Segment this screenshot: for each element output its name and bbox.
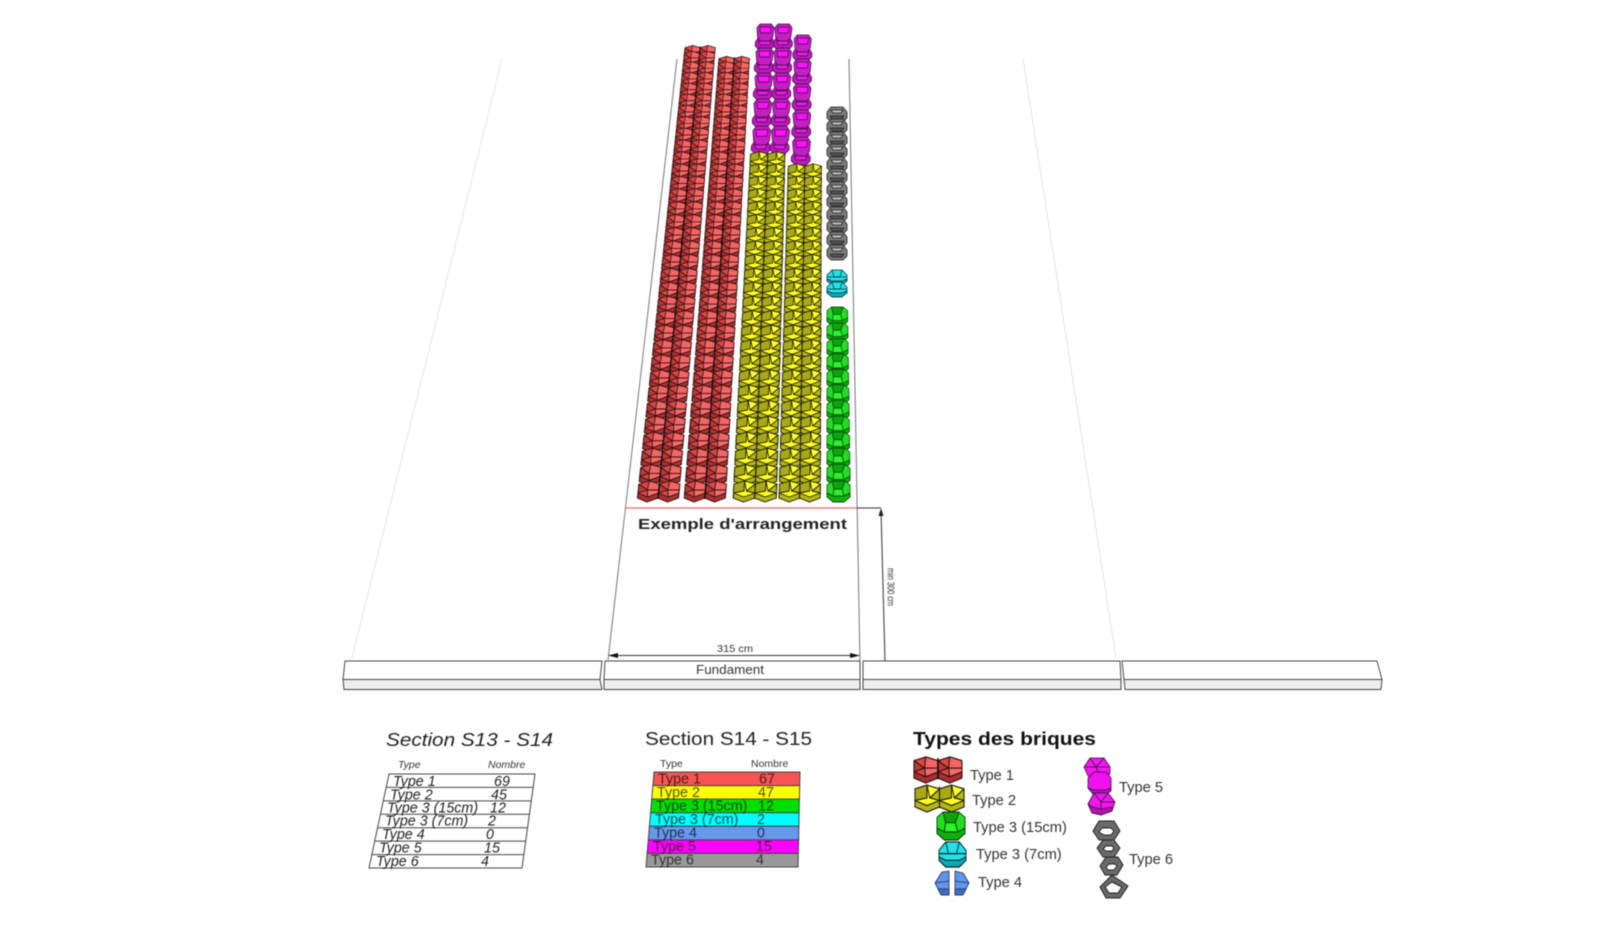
panel: legend of brick types <box>913 729 1173 898</box>
foundation blocks <box>343 661 1382 690</box>
row text: Type 6 <box>651 852 694 868</box>
table rows: Type 3 (7cm) <box>385 814 468 830</box>
icon: type 6 <box>1093 821 1128 898</box>
table rows: Type 5 <box>379 840 422 856</box>
coloured rows <box>646 772 800 867</box>
legend labels: Type 6 <box>1129 852 1173 868</box>
outer guide line left <box>352 59 502 658</box>
table rows: 12 <box>490 800 506 816</box>
red limit line <box>625 507 857 509</box>
column headers: Nombre <box>751 758 789 770</box>
column headers <box>660 758 789 770</box>
foundation block 1 <box>343 661 602 690</box>
icon: type 3 15cm <box>937 812 965 840</box>
foundation block 2: fundament: Fundament <box>696 663 765 677</box>
row text: 2 <box>757 812 765 828</box>
section S14 title: Section S14 - S15 <box>645 729 812 749</box>
legend labels: Type 1 <box>970 768 1014 784</box>
table rows: 45 <box>491 788 507 804</box>
table rows: Type 1 <box>393 774 436 790</box>
brick arrangement <box>637 24 850 502</box>
row text: 0 <box>757 826 765 842</box>
foundation block 2: fundament <box>604 661 860 690</box>
icon: type 5 <box>1084 758 1115 815</box>
icon: type 4 <box>935 871 969 895</box>
table rows: 4 <box>481 854 489 870</box>
legend labels: Type 4 <box>978 875 1022 891</box>
dimension extension line <box>857 507 881 509</box>
foundation block 3 <box>863 661 1121 690</box>
dimension arrow: min 300 cm <box>878 508 896 661</box>
dimension arrow: 315 cm: 315 cm <box>717 643 753 655</box>
icon: type 3 7cm <box>939 842 966 867</box>
row text: 4 <box>756 852 764 868</box>
row text: Type 4 <box>654 826 697 842</box>
row text: 15 <box>756 839 772 855</box>
magenta column 1: type 5 bricks <box>751 24 775 154</box>
panel: section S14 - S15 table <box>645 729 812 868</box>
red column 1: type 1 bricks <box>637 45 726 502</box>
table rows: Type 2 <box>390 788 433 804</box>
panel: section S13 - S14 table <box>369 730 553 870</box>
icon: type 2 <box>915 785 964 812</box>
magenta column 3: type 5 bricks <box>791 35 812 165</box>
column headers: Type <box>398 759 421 771</box>
legend labels: Type 5 <box>1119 780 1163 796</box>
foundation block 4 <box>1122 661 1382 690</box>
section boundary right <box>849 59 860 664</box>
column headers <box>398 759 526 771</box>
section boundary left <box>608 59 677 660</box>
legend labels <box>970 768 1173 891</box>
icon: type 1 <box>914 757 962 783</box>
row text <box>651 772 775 868</box>
dimension arrow: min 300 cm: min 300 cm <box>884 568 896 606</box>
table rows: Type 3 (15cm) <box>387 800 478 816</box>
column headers: Nombre <box>488 759 526 771</box>
legend labels: Type 3 (15cm) <box>973 820 1067 836</box>
table rows: 15 <box>484 840 500 856</box>
table rows: 0 <box>486 827 494 843</box>
green column: type 3 15cm bricks <box>827 307 850 502</box>
heading: exemple d'arrangement: Exemple d'arrangement <box>638 516 847 533</box>
column headers: Type <box>660 758 683 770</box>
table grid <box>369 774 535 868</box>
row text: Type 3 (7cm) <box>655 812 738 828</box>
red column 2: type 1 bricks <box>684 56 760 502</box>
row text: 12 <box>758 798 774 814</box>
row text: Type 1 <box>658 772 701 788</box>
row text: 47 <box>758 785 774 801</box>
yellow column 2: type 2 bricks <box>779 164 829 502</box>
table rows: 2 <box>487 814 496 830</box>
table rows: Type 4 <box>382 827 425 843</box>
magenta column 2: type 5 bricks <box>770 24 793 154</box>
dimension arrow: 315 cm <box>608 643 860 658</box>
legend labels: Type 3 (7cm) <box>976 847 1062 863</box>
legend labels: Type 2 <box>972 793 1016 809</box>
table rows <box>376 774 510 870</box>
row text: Type 3 (15cm) <box>656 798 747 814</box>
row text: Type 5 <box>653 839 696 855</box>
row text: 67 <box>759 772 775 788</box>
outer guide line right <box>1023 59 1116 658</box>
yellow column 1: type 2 bricks <box>733 152 794 502</box>
section S13 title: Section S13 - S14 <box>386 730 553 750</box>
row text: Type 2 <box>657 785 700 801</box>
legend title: Types des briques <box>913 729 1096 749</box>
cyan column: type 3 7cm bricks <box>827 270 847 297</box>
table rows: 69 <box>494 774 510 790</box>
table rows: Type 6 <box>376 854 419 870</box>
grey column: type 6 bricks <box>827 107 847 260</box>
